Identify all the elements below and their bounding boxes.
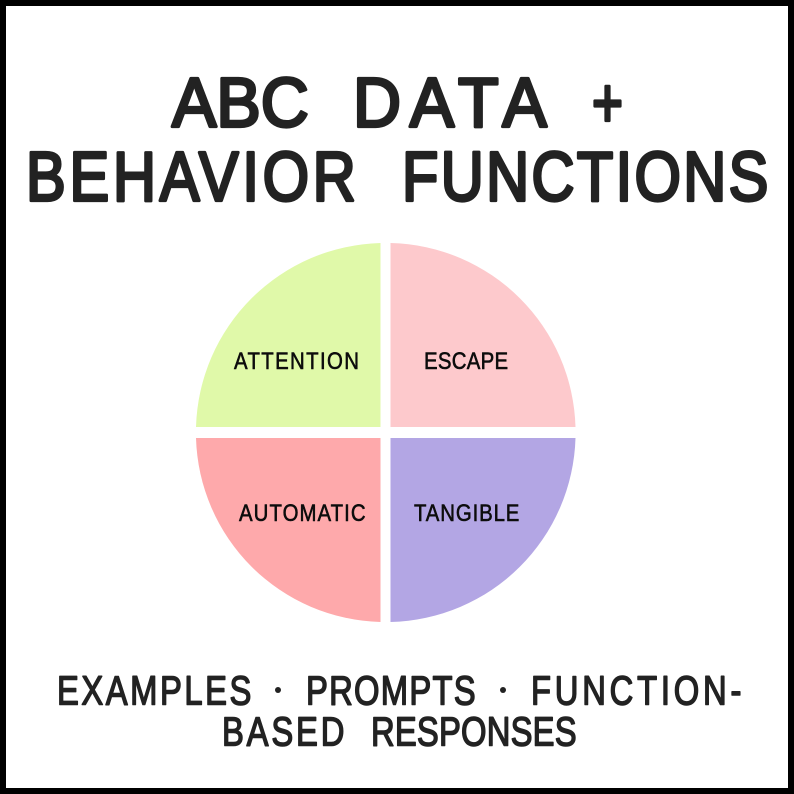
quadrant: tangible: TANGIBLE [414, 499, 519, 526]
quadrant: attention: ATTENTION [234, 347, 359, 374]
title: ABC [172, 64, 309, 142]
title: FUNCTIONS [402, 137, 768, 216]
quadrant: escape [390, 243, 576, 427]
subtitle [57, 667, 741, 754]
subtitle: BASED [222, 708, 344, 754]
subtitle: FUNCTION- [531, 667, 741, 713]
subtitle: RESPONSES [371, 708, 577, 754]
subtitle: PROMPTS [306, 667, 476, 713]
quadrant: tangible [390, 438, 576, 622]
quadrant: automatic [196, 438, 380, 622]
subtitle: EXAMPLES [57, 667, 251, 713]
quadrant chart: behavior functions [196, 243, 576, 622]
title: DATA [353, 64, 547, 142]
quadrant: attention [196, 243, 380, 427]
title [26, 64, 768, 216]
title: + [592, 64, 623, 142]
quadrant: automatic: AUTOMATIC [239, 499, 366, 526]
title: BEHAVIOR [26, 137, 356, 216]
quadrant: escape: ESCAPE [424, 347, 508, 374]
